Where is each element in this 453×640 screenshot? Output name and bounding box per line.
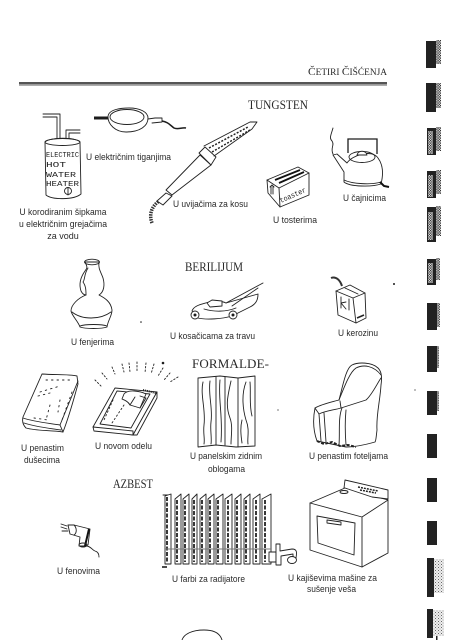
- icon: new suit in box: [93, 362, 178, 435]
- label: mattress: U penastim: [21, 443, 64, 453]
- scan specks: [140, 283, 416, 411]
- icon: kerosene can: [331, 277, 366, 323]
- label: suit: U novom odelu: [95, 441, 152, 451]
- side index tabs: [426, 40, 444, 640]
- fume rays: [95, 362, 178, 387]
- icon: radiator: [162, 494, 297, 567]
- label: water heater: U korodiranim šipkama: [20, 207, 106, 217]
- section heading: beryllium: BERILIJUM: [185, 259, 243, 274]
- header rule: [19, 82, 387, 86]
- label: lantern: U fenjerima: [71, 337, 114, 347]
- icon: foam armchair: [314, 363, 382, 447]
- label: frying pan: U električnim tiganjima: [86, 152, 171, 162]
- label: water heater: za vodu: [47, 231, 79, 241]
- label: mattress: dušecima: [24, 455, 60, 465]
- label: water heater: [19, 207, 107, 241]
- icon: curling iron: [151, 122, 257, 223]
- icon: kettle: [330, 128, 389, 187]
- icon: wall panelling: [198, 376, 255, 447]
- icon: electric frying pan: [94, 108, 186, 132]
- label: panelling: oblogama: [208, 464, 245, 474]
- icon: electric water heater: ELECTRIC: [46, 152, 79, 160]
- section heading: formaldehyde: FORMALDE-: [192, 356, 269, 371]
- icon: electric water heater: HEATER: [46, 181, 80, 189]
- label: panelling: U panelskim zidnim: [190, 451, 262, 461]
- label: radiator paint: U farbi za radijatore: [172, 574, 245, 584]
- label: mattress: [21, 443, 64, 465]
- section heading: asbestos: AZBEST: [113, 476, 153, 491]
- icon: clothes dryer: [310, 480, 388, 567]
- icon: toaster: [267, 167, 309, 207]
- label: armchair: U penastim foteljama: [309, 451, 388, 461]
- label: kerosene: U kerozinu: [338, 328, 378, 338]
- label: kettle: U čajnicima: [343, 193, 386, 203]
- label: clothes dryer: sušenje veša: [307, 584, 356, 594]
- label: clothes dryer: U kajiševima mašine za: [288, 573, 377, 583]
- icon: electric water heater: HOT: [46, 162, 67, 170]
- icon: electric water heater: [43, 114, 81, 199]
- label: panelling: [190, 451, 262, 474]
- icon: foam mattress: [23, 374, 78, 432]
- label: toaster: U tosterima: [273, 215, 317, 225]
- icon: toaster: toaster: [279, 187, 308, 206]
- radiator fins: [165, 494, 271, 564]
- label: clothes dryer: [288, 573, 377, 594]
- icon: lawn mower: [191, 283, 263, 319]
- icon: electric water heater: WATER: [46, 172, 77, 180]
- icon: lantern vase: [71, 259, 112, 328]
- icon: cropped sketch at page bottom: [182, 630, 222, 640]
- running title: ČETIRI ČIŠĆENJA: [308, 66, 388, 78]
- icon: hair dryer: [61, 524, 99, 557]
- section heading: tungsten: TUNGSTEN: [248, 97, 309, 112]
- label: lawn mower: U kosačicama za travu: [170, 331, 255, 341]
- label: hair dryer: U fenovima: [57, 566, 100, 576]
- label: water heater: u električnim grejačima: [19, 219, 107, 229]
- label: curling iron: U uvijačima za kosu: [173, 199, 248, 209]
